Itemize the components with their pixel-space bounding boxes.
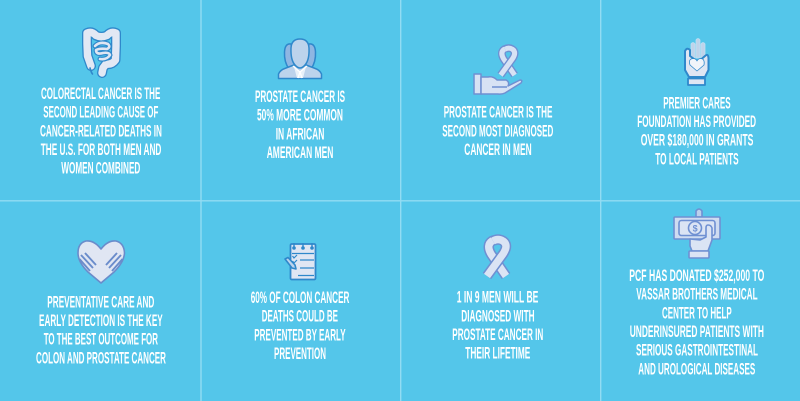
panel: prostate cancer in African American men [201, 0, 401, 200]
panel: colorectal cancer [0, 0, 201, 200]
text: 1 in 9 men fact: THEIR LIFETIME [465, 345, 530, 363]
text: PCF donation fact [629, 267, 764, 378]
icon: heart with hands [78, 241, 124, 283]
text: preventative care fact: EARLY DETECTION IS THE KEY [39, 312, 163, 330]
icon: group of men [278, 39, 322, 78]
text: colorectal fact: THE U.S. FOR BOTH MEN AND [41, 141, 161, 159]
panel: PCF donation [601, 201, 800, 401]
panel: colon cancer deaths: 60% OF COLON CANCER [251, 289, 349, 307]
panel: Premier Cares Foundation [601, 0, 800, 200]
icon: hand holding dollar bill [674, 209, 720, 258]
panel: second most diagnosed [401, 0, 601, 200]
panel: 1 in 9 men: PROSTATE CANCER IN [452, 326, 543, 344]
panel: 1 in 9 men [401, 201, 601, 401]
icon: awareness ribbon [487, 240, 506, 276]
panel: prostate cancer in African American men: PROSTATE CANCER IS [255, 88, 345, 106]
text: colorectal fact [40, 85, 162, 178]
text: colon deaths fact: PREVENTED BY EARLY [254, 326, 346, 344]
text: dollar sign on bill: $ [693, 224, 698, 234]
text: Premier Cares fact: PREMIER CARES [663, 94, 731, 112]
icon: intestines [87, 32, 116, 74]
text: preventative care fact [36, 294, 166, 367]
text: prostate 50% fact [255, 88, 345, 162]
text: second most diagnosed fact [442, 104, 553, 159]
panel: colon cancer deaths [201, 201, 401, 401]
panel: second most diagnosed: SECOND MOST DIAGNOSED [442, 122, 553, 140]
text: colon deaths fact [251, 289, 349, 363]
text: 1 in 9 men fact: 1 IN 9 MEN WILL BE [457, 289, 538, 307]
text: 1 in 9 men fact: DIAGNOSED WITH [461, 307, 535, 325]
panel: colorectal cancer: COLORECTAL CANCER IS THE [41, 85, 160, 103]
text: colorectal fact: WOMEN COMBINED [61, 160, 140, 178]
text: prostate 50% fact: 50% MORE COMMON [257, 107, 343, 125]
icon: raised hand with heart [685, 38, 708, 85]
icon: hand holding ribbon [474, 48, 522, 94]
text: preventative care fact: PREVENTATIVE CARE AND [47, 294, 154, 312]
text: Premier Cares fact [637, 94, 756, 168]
text: prostate 50% fact: IN AFRICAN [276, 125, 324, 143]
text: colon deaths fact: DEATHS COULD BE [262, 308, 338, 326]
text: colon deaths fact: PREVENTION [274, 345, 326, 363]
icon: notepad and pencil [285, 243, 316, 280]
panel: second most diagnosed: PROSTATE CANCER IS THE [444, 104, 552, 122]
panel: colorectal cancer: SECOND LEADING CAUSE OF [43, 104, 158, 122]
text: preventative care fact: TO THE BEST OUTCOME FOR [44, 331, 158, 349]
text: 1 in 9 men fact [452, 289, 543, 363]
text: second most diagnosed fact: CANCER IN MEN [464, 141, 532, 159]
panel: preventative care [0, 201, 201, 401]
panel: preventative care: COLON AND PROSTATE CANCER [36, 349, 166, 367]
panel: colorectal cancer: CANCER-RELATED DEATHS IN [40, 122, 162, 140]
text: prostate 50% fact: AMERICAN MEN [267, 144, 333, 162]
